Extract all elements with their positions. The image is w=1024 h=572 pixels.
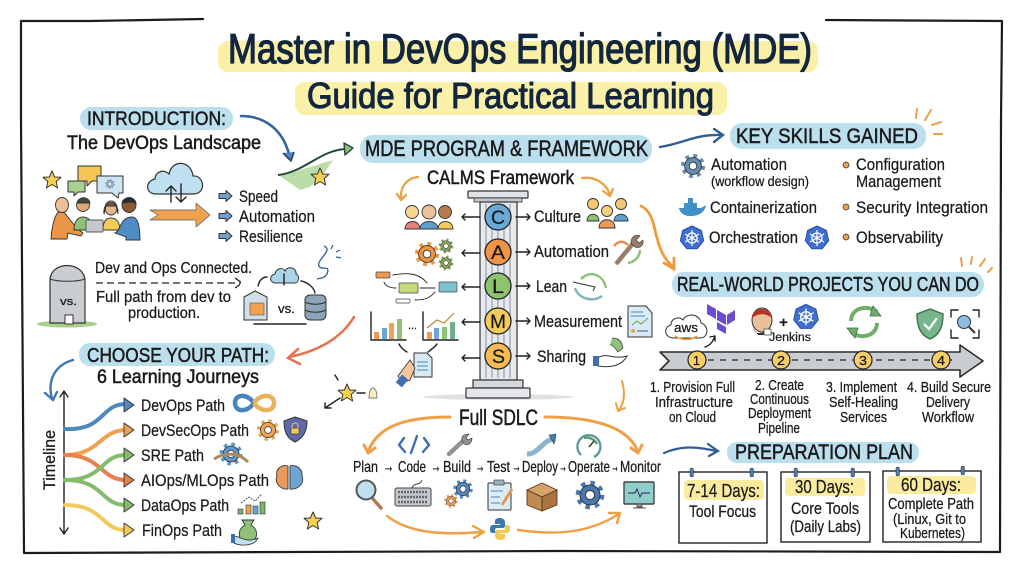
heading: key skills: KEY SKILLS GAINED: [736, 125, 918, 148]
SDLC stage labels: →: [611, 456, 619, 477]
CALMS labels: Measurement: [534, 312, 622, 331]
icon: three people: [405, 205, 453, 229]
text: project descriptions: Self-Healing: [829, 394, 898, 411]
text: project descriptions: 3. Implement: [826, 379, 898, 396]
list: benefits: Speed: [239, 187, 278, 206]
panel: real-world projects: [650, 257, 992, 437]
icon: bar charts: ...: [408, 318, 417, 332]
icon: star near green arrow: [311, 168, 329, 185]
icon: keyboard: [395, 480, 431, 506]
CALMS labels: Culture: [534, 207, 581, 226]
text: project descriptions: Pipeline: [758, 420, 800, 437]
icon: box: [527, 483, 557, 511]
icon: clipboard: [488, 480, 512, 510]
panel: program and CALMS framework: [360, 135, 652, 400]
card: 60 days: Kubernetes): [900, 525, 965, 542]
icon: lean flow diagram: [376, 272, 457, 303]
text: project descriptions: Workflow: [922, 409, 974, 426]
heading: projects: [672, 257, 992, 297]
card: 30 days: 30 Days:: [795, 477, 854, 497]
card: 60 days: Complete Path: [888, 496, 974, 513]
text: project descriptions: Delivery: [926, 394, 970, 411]
heading: introduction: [67, 107, 261, 154]
connector arrows: [462, 214, 530, 361]
text: project descriptions: Deployment: [748, 405, 812, 422]
icon: gauge: [577, 435, 600, 457]
list: benefits: Resilience: [239, 227, 303, 246]
SDLC stage labels: →: [559, 456, 567, 477]
SDLC stage labels: Build: [443, 459, 471, 476]
arrow: project timeline: 3: [859, 353, 867, 368]
list: benefits: [219, 187, 315, 246]
panel: introduction: [37, 107, 341, 328]
text: project descriptions: 1. Provision Full: [650, 379, 735, 396]
list: learning paths: [141, 396, 269, 540]
SDLC stage labels: Deploy: [522, 459, 558, 476]
text: project descriptions: Services: [840, 409, 887, 426]
CALMS labels: Lean: [536, 277, 567, 296]
SDLC stage labels: Code: [398, 459, 426, 476]
arrow: SDLC right arc: [545, 417, 642, 453]
icon: shield with check: [917, 309, 943, 339]
icon: aws cloud: [666, 315, 715, 347]
heading: MDE program: MDE PROGRAM & FRAMEWORK: [365, 136, 648, 161]
icon: kubernetes wheels: [680, 226, 829, 249]
heading: choose your path: CHOOSE YOUR PATH:: [87, 345, 269, 367]
icon: scattered stars and dashes: [304, 375, 377, 529]
icon: team group: [587, 198, 628, 228]
CALMS letter circles: L: [492, 277, 504, 298]
list: learning paths: DevSecOps Path: [141, 421, 249, 440]
skills list: Observability: [856, 228, 943, 247]
icon: cloud connected to warehouse and database: vs.: [278, 301, 295, 316]
icon: gears: [417, 240, 452, 269]
card: 60 days: (Linux, Git to: [893, 511, 966, 528]
panel: choose your path: [40, 343, 307, 545]
SDLC stage labels: →: [431, 456, 441, 477]
icon: deploy arrow: [527, 434, 556, 454]
SDLC stage labels: Test: [487, 459, 510, 476]
title: Master in DevOps Engineering (MDE): [228, 25, 812, 72]
text: dev and ops connected: production.: [128, 305, 200, 322]
list: learning paths: FinOps Path: [142, 521, 222, 540]
icon: silo: vs.: [60, 296, 77, 308]
icon: kubernetes: [794, 304, 818, 328]
icon: team of four around a laptop: [51, 198, 140, 240]
icon: infinity loop: [235, 396, 274, 410]
skills list: [709, 155, 988, 247]
icon: money bag in hand: [231, 520, 258, 545]
card: 7-14 days: 7-14 Days:: [687, 481, 760, 501]
icon: code brackets: [399, 436, 429, 453]
chart: branching path ribbons: [65, 398, 134, 537]
title: [218, 25, 818, 116]
CALMS letter circles: C: [491, 208, 505, 229]
panel: key skills: [679, 109, 988, 249]
arrow: lower left orange: [387, 516, 484, 538]
icon: jenkins: [752, 308, 772, 335]
skills list: Security Integration: [856, 198, 988, 217]
heading: choose your path: [79, 343, 275, 388]
icon: SRE gear: [214, 444, 248, 464]
arrow: project timeline: [660, 345, 983, 377]
arrow: curved right: [582, 178, 613, 196]
skills list: Configuration: [856, 155, 945, 174]
icon: cloud connected to warehouse and database: [244, 245, 341, 324]
card: 60 days: [883, 466, 981, 542]
arrow: orange down to SDLC: [616, 381, 625, 411]
arrow: program to projects: [641, 206, 674, 269]
list: learning paths: DataOps Path: [141, 496, 229, 515]
label: Jenkins: Jenkins: [769, 332, 811, 344]
skills list: (workflow design): [711, 174, 809, 189]
list: benefits: Automation: [239, 207, 315, 226]
list: learning paths: AIOps/MLOps Path: [141, 471, 269, 490]
CALMS letter circles: M: [490, 312, 506, 333]
arrow: program to choose your path: [288, 317, 354, 364]
icon: self-healing cycle: [847, 306, 881, 338]
pillar: [423, 191, 573, 400]
text: project descriptions: 2. Create: [755, 377, 804, 394]
icon: speech bubbles: [68, 166, 123, 198]
icon: brain: [276, 466, 303, 489]
timeline axis: [40, 391, 68, 534]
arrow: to preparation plan: [664, 444, 718, 456]
icon: terraform: [707, 304, 735, 334]
heading: introduction: INTRODUCTION:: [87, 109, 226, 130]
panel: full SDLC: [353, 405, 662, 540]
icon: build gears: [445, 481, 471, 507]
panel: preparation plan: [679, 441, 981, 543]
card: 30 days: [781, 468, 870, 542]
CALMS labels: [534, 207, 622, 366]
card: 7-14 days: [679, 468, 767, 543]
icon: docker whale: [679, 198, 706, 216]
icon: python logo: [490, 518, 510, 540]
arrow: project timeline: 2: [777, 353, 785, 368]
icon: cloud with up and down arrows: [148, 163, 203, 202]
icon: operate gear: [578, 483, 602, 507]
card: 30 days: Core Tools: [791, 499, 859, 518]
icon: scan magnifier: [951, 310, 979, 338]
CALMS letter circles: S: [492, 347, 505, 368]
arrow: program to key skills: [660, 129, 723, 147]
text: project descriptions: on Cloud: [669, 409, 716, 426]
arrow: lower right orange: [518, 513, 620, 533]
icon: aws cloud: aws: [674, 320, 699, 335]
CALMS letter circles: [485, 204, 511, 369]
icon: gear and shield: [259, 417, 307, 442]
card: 30 days: (Daily Labs): [790, 517, 861, 536]
SDLC stage labels: →: [475, 456, 485, 477]
heading: choose your path: 6 Learning Journeys: [97, 367, 259, 388]
arrow: intro to program: [241, 116, 353, 190]
icon: data chart: [238, 494, 265, 514]
CALMS labels: Automation: [534, 242, 609, 261]
list: learning paths: SRE Path: [141, 446, 204, 465]
list: learning paths: DevOps Path: [141, 396, 225, 415]
skills list: Management: [856, 172, 941, 191]
CALMS labels: Sharing: [537, 347, 586, 366]
arrow: blue curve to timeline: [45, 360, 73, 400]
heading: key skills: [730, 109, 942, 149]
heading: Full SDLC: Full SDLC: [459, 405, 538, 430]
icon: magnifier: [356, 480, 381, 508]
icon: wrench: [449, 434, 472, 454]
icon: monitor: [624, 482, 654, 508]
icon: bar charts: [371, 312, 458, 340]
SDLC stage labels: →: [383, 456, 394, 477]
text: project descriptions: Infrastructure: [655, 394, 733, 411]
icon: sharing hand: [593, 338, 627, 367]
skills list: Automation: [711, 155, 787, 174]
text: plus: +: [779, 314, 788, 330]
skills list: Containerization: [710, 198, 817, 217]
skills list: Orchestration: [709, 228, 798, 247]
SDLC stage labels: [353, 456, 662, 477]
icon: star: [43, 171, 61, 188]
text: dev and ops connected: Dev and Ops Connected.: [95, 260, 252, 277]
SDLC stage labels: →: [512, 456, 521, 477]
card: 7-14 days: Tool Focus: [689, 502, 756, 521]
icon: automation gear: [683, 156, 703, 176]
text: project descriptions: Continuous: [750, 391, 809, 408]
text: dev and ops connected: [95, 260, 252, 322]
icon: wrench and arrows: [614, 235, 643, 264]
heading: CALMS framework: CALMS Framework: [427, 168, 574, 189]
arrow: curved left: [397, 177, 418, 200]
icon: report: [628, 306, 652, 337]
arrow: SDLC left arc: [364, 417, 450, 453]
arrow: orange progress: [150, 203, 210, 227]
icon: document held by hand: [396, 344, 437, 387]
text: project descriptions: [650, 377, 991, 437]
arrow: project timeline: 1: [693, 353, 700, 368]
text: project descriptions: 4. Build Secure: [907, 379, 991, 396]
title: Guide for Practical Learning: [307, 75, 714, 116]
SDLC stage labels: Monitor: [620, 459, 662, 476]
SDLC stage labels: Plan: [353, 459, 378, 476]
icon: silo: [37, 266, 97, 328]
heading: preparation plan: PREPARATION PLAN: [735, 441, 913, 464]
icon: lean cycle: [573, 274, 606, 299]
CALMS letter circles: A: [491, 243, 505, 264]
timeline axis: Timeline: [40, 430, 59, 490]
text: dev and ops connected: Full path from dev to: [96, 289, 231, 306]
card: 60 days: 60 Days:: [901, 475, 961, 495]
arrow: project timeline: 4: [937, 353, 945, 368]
SDLC stage labels: Operate: [568, 459, 610, 476]
heading: introduction: The DevOps Landscape: [67, 133, 261, 154]
